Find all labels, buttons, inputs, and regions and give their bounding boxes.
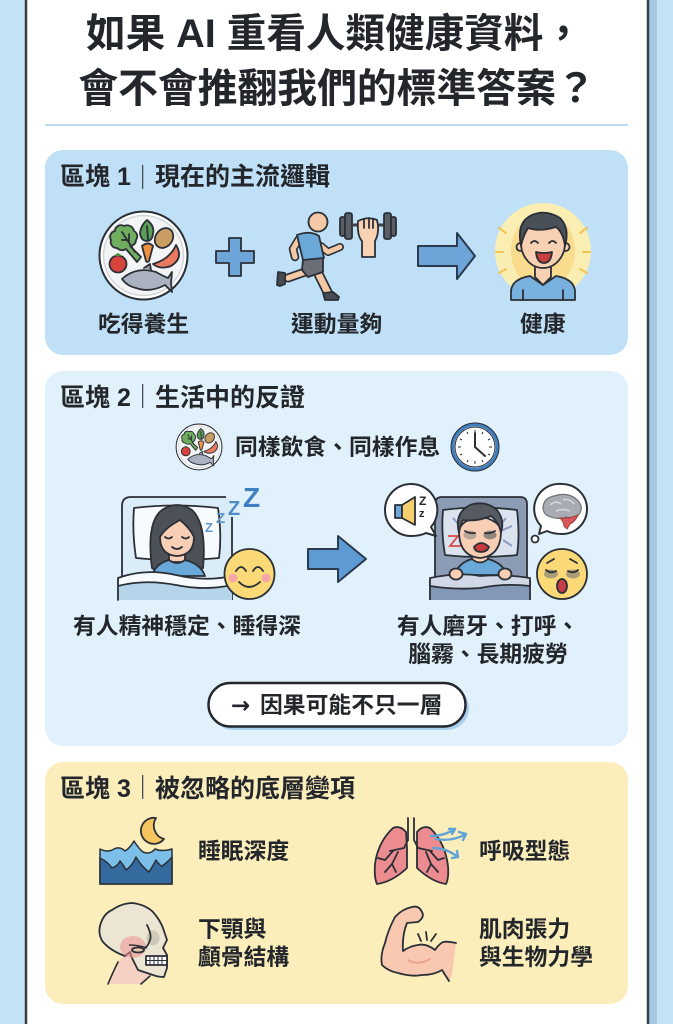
label: 有人磨牙、打呼、腦霧、長期疲勞: 有人磨牙、打呼、: [397, 613, 579, 639]
icon: lungs with airflow: [375, 818, 466, 884]
illustration: woman sleeping well: Z: [243, 482, 260, 513]
label: 肌肉張力與生物力學: [479, 916, 593, 970]
panel: 區塊 1 現在的主流邏輯: [45, 150, 628, 355]
illustration: woman sleeping well: Z: [216, 510, 225, 527]
callout: 因果可能不只一層: →: [231, 693, 250, 719]
heading: 區塊 3: 區塊 3: [60, 775, 131, 803]
label: 肌肉張力與生物力學: 與生物力學: [479, 944, 593, 970]
icon: tired face: [537, 549, 587, 599]
label: 睡眠深度: 睡眠深度: [198, 838, 289, 864]
icon: plus: [216, 238, 254, 276]
label: 下顎與顱骨結構: [198, 916, 289, 970]
illustration: man sleeping poorly: [385, 484, 587, 600]
heading: 區塊 2: [60, 384, 305, 412]
heading: 區塊 1: 現在的主流邏輯: [155, 163, 330, 191]
icon: sleep depth waves and moon: [100, 818, 172, 884]
icon: food plate: [100, 212, 188, 300]
icon: snore speech bubble: Z: [419, 494, 426, 508]
heading: 區塊 2: 生活中的反證: [155, 384, 305, 412]
panel: 區塊 2 生活中的反證: [45, 371, 628, 746]
icon: skull and jaw: [99, 903, 167, 984]
heading: 區塊 3: [60, 775, 355, 803]
label: 健康: 健康: [520, 311, 566, 337]
label: 有人精神穩定、睡得深: 有人精神穩定、睡得深: [73, 613, 301, 639]
callout: 因果可能不只一層: [208, 683, 469, 730]
icon: runner with dumbbell: [277, 212, 396, 300]
label: 下顎與顱骨結構: 下顎與: [198, 916, 266, 942]
label: 有人磨牙、打呼、腦霧、長期疲勞: [397, 613, 579, 667]
label: 下顎與顱骨結構: 顱骨結構: [198, 944, 289, 970]
arrow: [418, 233, 475, 279]
icon: flexed arm: [381, 907, 456, 981]
heading: 區塊 1: [60, 163, 330, 191]
label: 吃得養生: 吃得養生: [98, 311, 189, 337]
panel: 區塊 3 被忽略的底層變項: [45, 762, 628, 1004]
text: 同樣飲食、同樣作息: 同樣飲食、同樣作息: [235, 434, 440, 460]
icon: clock: [451, 423, 499, 471]
icon: happy person: [495, 203, 591, 300]
title: [78, 12, 596, 111]
heading: 區塊 1: 區塊 1: [60, 163, 131, 191]
label: 運動量夠: 運動量夠: [291, 311, 382, 337]
title: 會不會推翻我們的標準答案？: [78, 67, 596, 111]
heading: 區塊 2: 區塊 2: [60, 384, 131, 412]
label: 肌肉張力與生物力學: 肌肉張力: [479, 916, 570, 942]
heading: 區塊 3: 被忽略的底層變項: [155, 775, 355, 803]
icon: snore speech bubble: [385, 484, 437, 536]
icon: brain fog thought bubble: [532, 484, 587, 542]
illustration: woman sleeping well: Z: [205, 520, 213, 535]
callout: 因果可能不只一層: 因果可能不只一層: [260, 692, 442, 718]
illustration: woman sleeping well: Z: [228, 498, 240, 520]
label: 有人磨牙、打呼、腦霧、長期疲勞: 腦霧、長期疲勞: [408, 641, 568, 667]
icon: snore speech bubble: z: [419, 508, 425, 520]
icon: small food plate: [176, 424, 222, 470]
label: 呼吸型態: 呼吸型態: [479, 838, 570, 864]
title: 如果 AI 重看人類健康資料，: [86, 12, 583, 56]
illustration: woman sleeping well: [118, 482, 274, 600]
arrow: [308, 536, 366, 582]
